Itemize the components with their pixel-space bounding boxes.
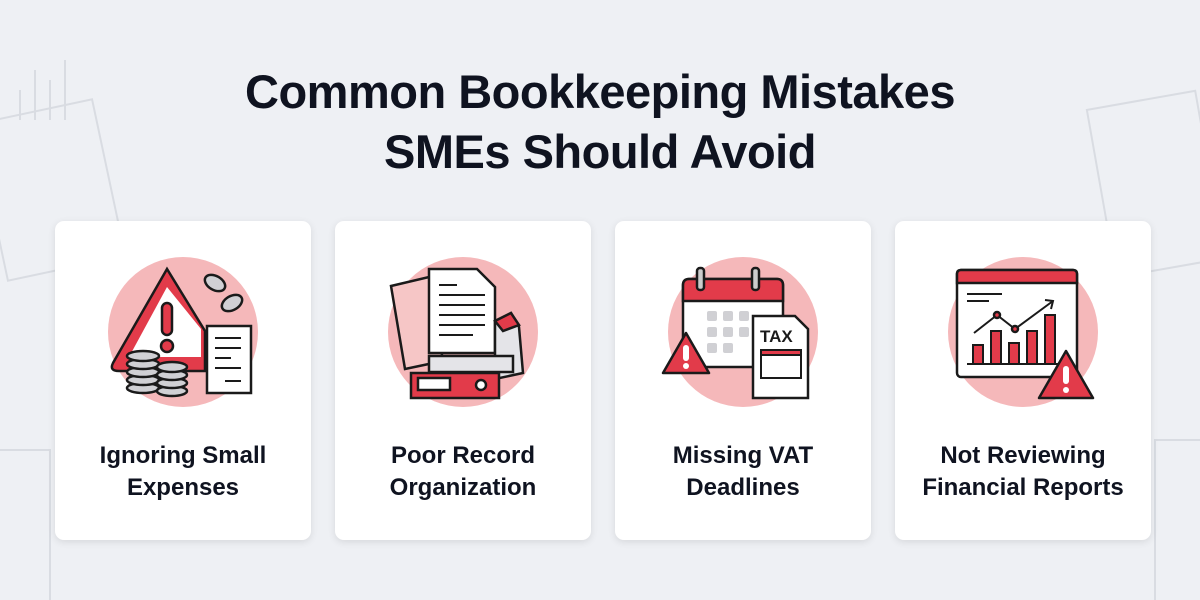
- title: [245, 65, 955, 178]
- panel: not reviewing financial reports: [895, 221, 1151, 540]
- icon: calendar, tax form, warning: [662, 257, 818, 407]
- label: [390, 442, 536, 501]
- label: Financial Reports: [922, 474, 1124, 501]
- label: [100, 442, 266, 501]
- label: Ignoring Small: [100, 442, 266, 469]
- icon: calendar, tax form, warning: TAX: [760, 327, 793, 346]
- label: Organization: [390, 474, 536, 501]
- label: [673, 442, 813, 501]
- title: Common Bookkeeping Mistakes: [245, 65, 955, 118]
- icon: chart window with warning: [948, 257, 1098, 407]
- label: Deadlines: [686, 474, 800, 501]
- icon: warning with coins and receipt: [108, 257, 258, 407]
- label: Poor Record: [391, 442, 535, 469]
- panel: poor record organization: [335, 221, 591, 540]
- panel: ignoring small expenses: [55, 221, 311, 540]
- title: SMEs Should Avoid: [384, 125, 816, 178]
- label: Not Reviewing: [940, 442, 1106, 469]
- label: Expenses: [127, 474, 239, 501]
- panel: missing VAT deadlines: [615, 221, 871, 540]
- icon: documents and binder: [388, 257, 538, 407]
- label: Missing VAT: [673, 442, 813, 469]
- label: [922, 442, 1124, 501]
